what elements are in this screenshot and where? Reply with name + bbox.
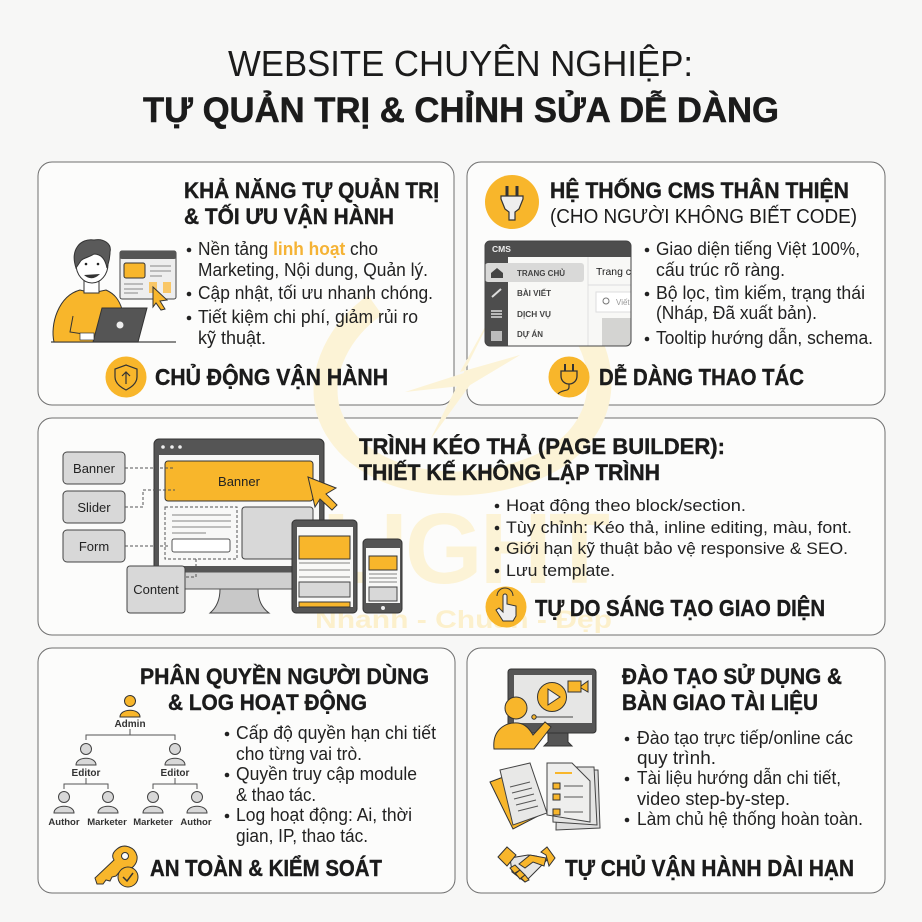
title: WEBSITE CHUYÊN NGHIỆP:	[228, 43, 693, 84]
bullet list: & thao tác.	[236, 785, 316, 805]
block: Slider: Slider	[77, 500, 111, 515]
block: Content: Content	[133, 582, 179, 597]
bullet list: Bộ lọc, tìm kiếm, trạng thái	[656, 283, 865, 303]
heading: HỆ THỐNG CMS THÂN THIỆN	[550, 177, 849, 203]
heading: & TỐI ƯU VẬN HÀNH	[184, 203, 394, 229]
block: Banner: Banner	[73, 461, 116, 476]
bullet list: Tài liệu hướng dẫn chi tiết,	[637, 767, 841, 788]
block: Form	[63, 530, 125, 562]
panel: self administration	[51, 178, 439, 398]
role: Editor right	[161, 744, 190, 779]
bullet list: gian, IP, thao tác.	[236, 826, 368, 846]
role: Marketer right: Marketer	[133, 817, 173, 828]
bullet list	[225, 723, 436, 846]
CMS screenshot mockup: CMS	[492, 244, 511, 254]
panel: page builder	[63, 434, 852, 628]
bullet list: cho từng vai trò.	[236, 744, 362, 764]
bullet list: Cập nhật, tối ưu nhanh chóng.	[198, 283, 433, 303]
tablet	[292, 520, 357, 613]
block: Slider	[63, 491, 125, 523]
watermark logo: LIGHT	[322, 493, 610, 605]
role: Author left: Author	[48, 817, 80, 828]
bullet list: Tùy chỉnh: Kéo thả, inline editing, màu, font.	[506, 518, 852, 537]
heading: TRÌNH KÉO THẢ (PAGE BUILDER):	[359, 434, 725, 459]
footer label: DỄ DÀNG THAO TÁC	[599, 362, 804, 390]
bullet list	[645, 239, 873, 348]
icon: cursor	[308, 477, 337, 510]
CMS screenshot mockup	[485, 241, 631, 346]
CMS screenshot mockup: BÀI VIẾT	[517, 288, 551, 298]
role: Admin: Admin	[114, 719, 146, 730]
monitor	[154, 439, 324, 613]
role: Marketer left: Marketer	[87, 817, 127, 828]
panel: training	[490, 664, 863, 882]
role: Author right: Author	[180, 817, 212, 828]
icon: plug badge	[485, 175, 539, 229]
heading: THIẾT KẾ KHÔNG LẬP TRÌNH	[359, 460, 660, 485]
role: Author right	[180, 792, 212, 828]
heading	[184, 178, 439, 229]
footer label: AN TOÀN & KIỂM SOÁT	[150, 854, 382, 881]
bullet list: cấu trúc rõ ràng.	[656, 260, 785, 280]
bullet list: Quyền truy cập module	[236, 764, 417, 784]
role: Editor right: Editor	[161, 768, 190, 779]
monitor: Banner	[218, 474, 261, 489]
bullet list: video step-by-step.	[637, 789, 790, 809]
bullet list	[495, 496, 852, 580]
panel: page builder background	[38, 418, 885, 635]
role: Editor left	[72, 744, 101, 779]
bullet list: Log hoạt động: Ai, thời	[236, 805, 412, 825]
footer label: CHỦ ĐỘNG VẬN HÀNH	[155, 362, 388, 390]
CMS screenshot mockup: TRANG CHỦ	[517, 269, 565, 278]
CMS screenshot mockup: DỊCH VỤ	[517, 310, 551, 319]
panel: self administration background	[38, 162, 454, 405]
bullet list: Tiết kiệm chi phí, giảm rủi ro	[198, 307, 418, 327]
icon: video training monitor	[494, 669, 596, 749]
title: TỰ QUẢN TRỊ & CHỈNH SỬA DỄ DÀNG	[143, 90, 779, 130]
watermark logo: Nhanh - Chuẩn - Đẹp	[315, 606, 612, 634]
heading: ĐÀO TẠO SỬ DỤNG &	[622, 664, 842, 689]
role: Admin	[114, 696, 146, 730]
bullet list: Giới hạn kỹ thuật bảo vệ responsive & SEO.	[506, 539, 848, 558]
role: Marketer left	[87, 792, 127, 828]
role: Editor left: Editor	[72, 768, 101, 779]
bullet list: Hoạt động theo block/section.	[506, 496, 746, 515]
heading	[359, 434, 725, 485]
icon: key with check	[95, 846, 138, 887]
bullet list: Làm chủ hệ thống hoàn toàn.	[637, 809, 863, 829]
icon: person with laptop and browser	[51, 240, 176, 342]
heading: & LOG HOẠT ĐỘNG	[168, 690, 367, 715]
org chart	[48, 696, 212, 828]
icon: plug with cord badge	[548, 356, 590, 398]
footer label: TỰ CHỦ VẬN HÀNH DÀI HẠN	[565, 853, 854, 881]
icon: tap hand badge	[486, 586, 526, 628]
dashed connectors	[125, 468, 196, 577]
footer label: TỰ DO SÁNG TẠO GIAO DIỆN	[535, 594, 825, 621]
CMS screenshot mockup: Viết	[616, 298, 630, 307]
bullet list: quy trình.	[637, 748, 716, 768]
block: Banner	[63, 452, 125, 484]
illustration: drag and drop builder	[63, 439, 402, 613]
panel: training background	[467, 648, 885, 893]
title	[143, 43, 779, 130]
bullet list: Giao diện tiếng Việt 100%,	[656, 239, 860, 259]
bullet list: Marketing, Nội dung, Quản lý.	[198, 260, 428, 280]
phone	[363, 539, 402, 613]
panel: CMS	[485, 175, 873, 398]
bullet list: Đào tạo trực tiếp/online các	[637, 728, 853, 748]
bullet list: Nền tảng linh hoạt cho	[198, 239, 378, 259]
bullet list: Cấp độ quyền hạn chi tiết	[236, 723, 436, 743]
heading: KHẢ NĂNG TỰ QUẢN TRỊ	[184, 178, 439, 203]
heading	[622, 664, 842, 715]
block: Form: Form	[79, 539, 109, 554]
bullet list: kỹ thuật.	[198, 328, 266, 348]
heading: PHÂN QUYỀN NGƯỜI DÙNG	[140, 664, 429, 689]
watermark logo	[315, 300, 612, 634]
heading	[140, 664, 429, 715]
heading	[550, 177, 857, 228]
icon: documents	[490, 763, 600, 830]
heading: BÀN GIAO TÀI LIỆU	[622, 690, 818, 715]
bullet list	[625, 728, 863, 829]
icon: handshake	[498, 847, 555, 882]
role: Marketer right	[133, 792, 173, 828]
panel: CMS background	[467, 162, 885, 405]
CMS screenshot mockup: DỰ ÁN	[517, 330, 543, 339]
bullet list	[187, 239, 433, 348]
heading: (CHO NGƯỜI KHÔNG BIẾT CODE)	[550, 205, 857, 228]
panel: permissions background	[38, 648, 455, 893]
bullet list: (Nháp, Đã xuất bản).	[656, 303, 817, 323]
role: Author left	[48, 792, 80, 828]
block: Content	[127, 566, 185, 613]
CMS screenshot mockup: Trang c	[596, 266, 631, 278]
panel: permissions	[48, 664, 436, 887]
icon: shield badge	[106, 356, 146, 398]
bullet list: Lưu template.	[506, 561, 615, 580]
bullet list: Tooltip hướng dẫn, schema.	[656, 327, 873, 348]
